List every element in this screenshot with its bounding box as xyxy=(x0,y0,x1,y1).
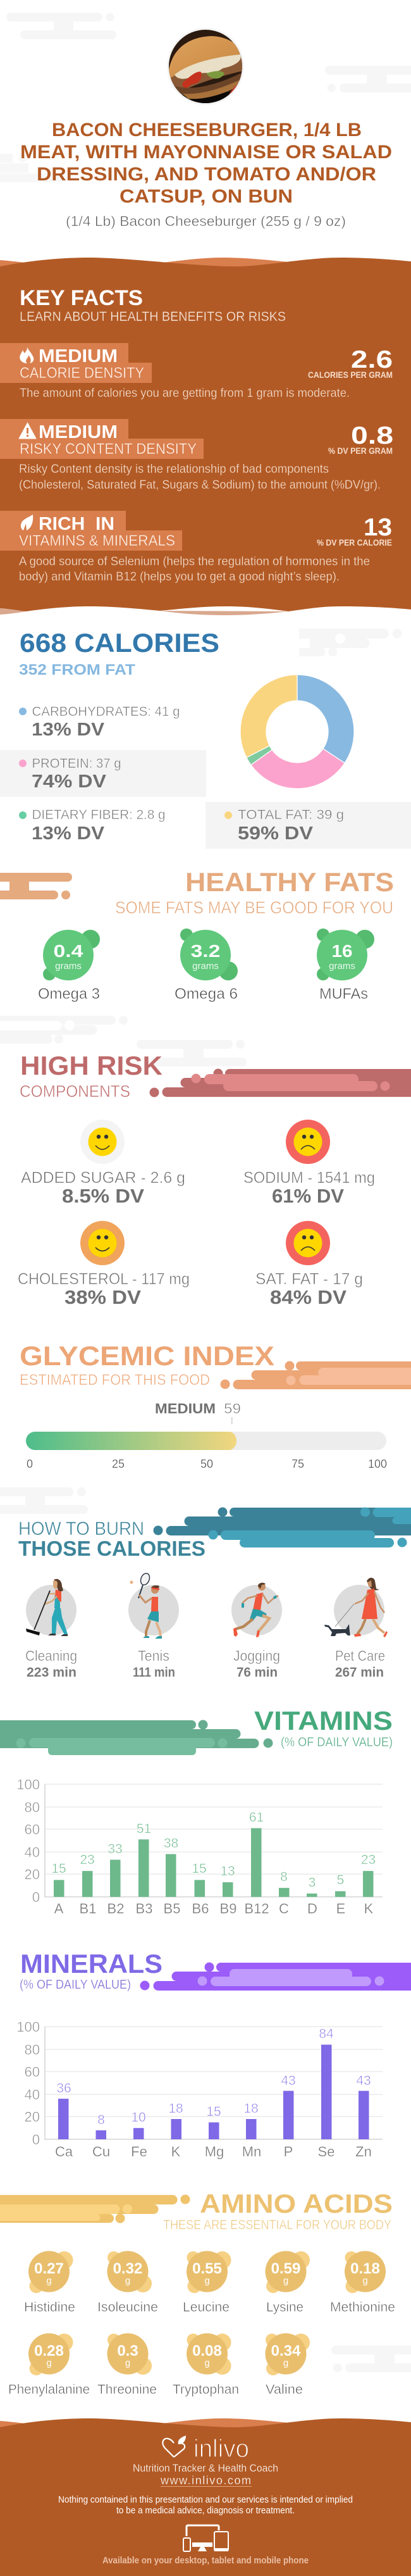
value unit: % DV PER GRAM xyxy=(328,446,393,456)
bar chart: minerals: 36 xyxy=(56,2081,71,2096)
badge: omega 6: grams xyxy=(192,961,219,972)
subheading: LEARN ABOUT HEALTH BENEFITS OR RISKS xyxy=(20,309,286,324)
amino: valine: g xyxy=(283,2358,288,2368)
background cloud top left xyxy=(6,13,116,39)
activity time: 111 min xyxy=(133,1665,175,1680)
background cloud above burn section xyxy=(0,1487,88,1514)
legend: carbohydrates: 13% DV xyxy=(32,720,105,740)
rating label: MEDIUM xyxy=(39,346,118,366)
panel: vitamins xyxy=(0,1706,393,1916)
bar chart: vitamins: 51 xyxy=(137,1822,151,1836)
serving subtitle: (1/4 Lb) Bacon Cheeseburger (255 g / 9 oz) xyxy=(66,213,346,229)
bar chart: minerals: 18 xyxy=(243,2101,259,2116)
subheading: ESTIMATED FOR THIS FOOD xyxy=(20,1372,210,1389)
bar chart: vitamins: B12 xyxy=(244,1901,269,1916)
risk: added sugar: 8.5% DV xyxy=(62,1185,144,1207)
bar chart: minerals: Ca xyxy=(55,2144,73,2160)
subheading: calories from fat: 352 FROM FAT xyxy=(19,661,135,678)
bar chart: vitamins: B9 xyxy=(220,1901,236,1916)
heading: HEALTHY FATS xyxy=(185,867,394,897)
label: RISKY CONTENT DENSITY xyxy=(20,441,197,458)
legend: dietary fiber: 13% DV xyxy=(32,823,105,844)
bar chart: minerals: 8 xyxy=(97,2113,105,2127)
subheading: (% OF DAILY VALUE) xyxy=(20,1978,131,1992)
title: MEAT, WITH MAYONNAISE OR SALAD xyxy=(20,142,392,163)
bar chart: vitamins: 38 xyxy=(164,1836,178,1851)
gauge value: MEDIUM xyxy=(155,1401,216,1416)
risk: sodium: 61% DV xyxy=(272,1185,344,1207)
legend: dietary fiber: DIETARY FIBER: 2.8 g xyxy=(32,808,166,822)
amino: histidine xyxy=(24,2251,75,2315)
amino: leucine: g xyxy=(204,2275,210,2286)
bar chart: minerals: P xyxy=(284,2144,293,2160)
legend: total fat: 59% DV xyxy=(238,823,314,844)
value unit: % DV PER CALORIE xyxy=(317,537,392,547)
amino: methionine: Methionine xyxy=(330,2300,395,2315)
background cloud above high risk right xyxy=(137,1040,247,1066)
legend: carbohydrates xyxy=(19,704,180,740)
risk: added sugar: ADDED SUGAR - 2.6 g xyxy=(21,1169,185,1187)
description: (Cholesterol, Saturated Fat, Sugars & Sodium) to the amount (%DV/gr). xyxy=(19,478,381,492)
gauge value: 59 xyxy=(224,1401,241,1416)
badge: omega 3: grams xyxy=(55,961,82,972)
rating label: MEDIUM xyxy=(39,422,118,442)
value unit: CALORIES PER GRAM xyxy=(308,370,393,380)
amino: methionine: g xyxy=(362,2275,368,2286)
amino: lysine xyxy=(266,2251,310,2315)
bar chart: vitamins: 20 xyxy=(25,1866,40,1882)
legend: protein: PROTEIN: 37 g xyxy=(32,756,121,771)
fact: calorie density xyxy=(0,343,393,400)
amino: lysine: g xyxy=(283,2275,288,2286)
risk: saturated fat: SAT. FAT - 17 g xyxy=(255,1270,363,1288)
panel: footer xyxy=(0,2418,411,2576)
bar chart: vitamins: 15 xyxy=(51,1861,66,1876)
value: 0.8 xyxy=(351,422,393,449)
bar chart: minerals: Se xyxy=(318,2144,334,2160)
label: CALORIE DENSITY xyxy=(20,365,144,382)
legend: dietary fiber xyxy=(19,808,166,844)
risk: cholesterol: CHOLESTEROL - 117 mg xyxy=(18,1270,190,1288)
disclaimer: to be a medical advice, diagnosis or treatment. xyxy=(116,2505,295,2516)
description: The amount of calories you are getting from 1 gram is moderate. xyxy=(20,387,350,400)
gauge scale: 0 xyxy=(27,1458,33,1470)
activity: pet care xyxy=(324,1578,388,1680)
availability note: Available on your desktop, tablet and mobile phone xyxy=(102,2555,309,2566)
badge: MUFAs: 16 xyxy=(331,941,353,961)
amino: phenylalanine: Phenylalanine xyxy=(8,2382,90,2397)
badge: omega 3: Omega 3 xyxy=(38,985,100,1003)
gauge bar xyxy=(26,1432,386,1450)
badge: MUFAs xyxy=(317,928,374,1003)
heading: calories: 668 CALORIES xyxy=(20,628,219,658)
bar chart: minerals: K xyxy=(171,2144,181,2160)
panel: how to burn calories xyxy=(18,1508,411,1680)
bar chart: vitamins: A xyxy=(54,1901,64,1916)
subheading: (% OF DAILY VALUE) xyxy=(281,1735,393,1749)
bar chart: vitamins: 0 xyxy=(32,1889,40,1905)
decorative cloud xyxy=(220,1361,411,1389)
activity time: 267 min xyxy=(335,1665,384,1680)
risk: sodium xyxy=(243,1120,375,1207)
bar chart: minerals xyxy=(16,2019,383,2160)
background cloud above high risk left xyxy=(0,1016,128,1044)
amino: threonine: 0.3 xyxy=(117,2342,138,2360)
badge: omega 3: 0.4 xyxy=(53,941,83,961)
bar chart: vitamins: 5 xyxy=(337,1873,344,1887)
activity: jogging xyxy=(231,1583,282,1680)
amino: leucine: 0.55 xyxy=(192,2260,222,2277)
activity label: Jogging xyxy=(233,1648,280,1664)
panel: key facts xyxy=(0,258,411,615)
bar chart: minerals: 0 xyxy=(32,2132,40,2148)
title: DRESSING, AND TOMATO AND/OR xyxy=(37,164,376,185)
decorative cloud xyxy=(0,2195,190,2223)
amino: threonine: Threonine xyxy=(97,2382,157,2397)
subheading: SOME FATS MAY BE GOOD FOR YOU xyxy=(115,898,393,917)
fact: risky content density xyxy=(0,419,393,492)
gauge tick xyxy=(231,1417,233,1424)
legend: protein: 74% DV xyxy=(32,772,107,792)
label: VITAMINS & MINERALS xyxy=(19,532,175,549)
icon: warning triangle xyxy=(19,423,36,439)
legend: total fat xyxy=(206,802,411,849)
description: A good source of Selenium (helps the regulation of hormones in the xyxy=(19,555,370,568)
value: 13 xyxy=(364,514,392,541)
icon: desktop, tablet and phone xyxy=(183,2525,228,2551)
amino: methionine: 0.18 xyxy=(350,2260,380,2277)
legend: carbohydrates: CARBOHYDRATES: 41 g xyxy=(32,704,180,719)
panel: glycemic index xyxy=(20,1341,411,1470)
risk: cholesterol: 38% DV xyxy=(64,1286,141,1308)
bar chart: minerals: 43 xyxy=(281,2073,296,2088)
amino: histidine: 0.27 xyxy=(34,2260,64,2277)
bar chart: minerals: 20 xyxy=(25,2109,40,2125)
risk: saturated fat xyxy=(255,1221,363,1308)
bar chart: vitamins: B3 xyxy=(136,1901,152,1916)
amino: lysine: 0.59 xyxy=(271,2260,300,2277)
decorative cloud xyxy=(0,1720,273,1755)
amino: leucine: Leucine xyxy=(183,2300,230,2315)
amino: isoleucine: 0.32 xyxy=(113,2260,142,2277)
amino: valine: 0.34 xyxy=(271,2342,301,2360)
description xyxy=(19,463,381,492)
description: body) and Vitamin B12 (helps you to get a good night’s sleep). xyxy=(19,570,340,584)
bar chart: vitamins: D xyxy=(307,1901,317,1916)
amino: histidine: Histidine xyxy=(24,2300,75,2315)
bar chart: minerals: 10 xyxy=(131,2110,146,2125)
heading line 2: THOSE CALORIES xyxy=(18,1537,206,1560)
bar chart: vitamins: B5 xyxy=(164,1901,180,1916)
donut chart xyxy=(240,675,354,789)
amino: methionine xyxy=(330,2251,395,2315)
subheading: COMPONENTS xyxy=(20,1082,130,1101)
amino: phenylalanine xyxy=(8,2333,90,2397)
amino: lysine: Lysine xyxy=(266,2300,304,2315)
badge: omega 6: Omega 6 xyxy=(175,985,238,1003)
decorative cloud xyxy=(153,1508,411,1547)
amino: threonine: g xyxy=(125,2358,130,2368)
disclaimer: Nothing contained in this presentation and our services is intended or implied xyxy=(58,2494,353,2505)
badge: MUFAs: grams xyxy=(329,961,355,972)
bar chart: vitamins: 100 xyxy=(16,1777,40,1792)
title xyxy=(20,120,392,207)
amino: tryptophan: Tryptophan xyxy=(173,2382,239,2397)
bar chart: vitamins: 3 xyxy=(309,1875,316,1890)
icon: leaf xyxy=(21,515,33,530)
tagline: Nutrition Tracker & Health Coach xyxy=(133,2462,278,2474)
activity label: Pet Care xyxy=(335,1648,385,1664)
gauge scale: 75 xyxy=(291,1458,304,1470)
activity label: Cleaning xyxy=(25,1648,77,1664)
bar chart: vitamins: 15 xyxy=(192,1861,207,1876)
amino: valine xyxy=(266,2333,310,2397)
rating label: RICH IN xyxy=(39,514,114,534)
bar chart: vitamins: 40 xyxy=(25,1844,40,1860)
bar chart: vitamins: 13 xyxy=(220,1864,235,1879)
bar chart: vitamins: 80 xyxy=(25,1799,40,1815)
badge: MUFAs: MUFAs xyxy=(319,985,368,1003)
activity: cleaning xyxy=(25,1579,77,1680)
risk: sodium: SODIUM - 1541 mg xyxy=(243,1169,375,1187)
background cloud near amino acids xyxy=(331,2346,411,2372)
bar chart: vitamins: 23 xyxy=(80,1853,95,1867)
decorative cloud xyxy=(140,1962,411,1991)
bar chart: vitamins: E xyxy=(336,1901,345,1916)
amino: isoleucine: Isoleucine xyxy=(97,2300,158,2315)
panel: minerals xyxy=(16,1949,411,2160)
activity time: 76 min xyxy=(236,1665,278,1680)
bar chart: minerals: Mg xyxy=(205,2144,224,2160)
bar chart: minerals: Cu xyxy=(92,2144,110,2160)
bar chart: vitamins: K xyxy=(364,1901,374,1916)
bar chart: vitamins: C xyxy=(279,1901,289,1916)
disclaimer xyxy=(58,2494,353,2516)
logo wordmark: inlivo xyxy=(193,2435,249,2463)
gauge scale: 50 xyxy=(200,1458,213,1470)
panel: high risk components xyxy=(18,1051,411,1308)
bar chart: minerals: 40 xyxy=(25,2087,40,2103)
background cloud near calories xyxy=(299,628,402,656)
bar chart: minerals: Zn xyxy=(355,2144,372,2160)
bar chart: vitamins: B6 xyxy=(192,1901,209,1916)
heading: AMINO ACIDS xyxy=(200,2189,393,2218)
amino: valine: Valine xyxy=(266,2382,303,2397)
bar chart: vitamins: 60 xyxy=(25,1822,40,1837)
bar chart: minerals: 43 xyxy=(356,2073,371,2088)
panel: healthy fats xyxy=(0,867,394,1003)
amino: tryptophan xyxy=(173,2333,239,2397)
bar chart: minerals: 84 xyxy=(319,2027,334,2041)
badge: omega 6 xyxy=(175,928,238,1003)
bar chart: minerals: 100 xyxy=(16,2019,40,2035)
bar chart: minerals: 18 xyxy=(168,2101,183,2116)
bar chart: minerals: 80 xyxy=(25,2042,40,2058)
amino: histidine: g xyxy=(46,2275,52,2286)
activity time: 223 min xyxy=(27,1665,77,1680)
risk: saturated fat: 84% DV xyxy=(270,1286,347,1308)
heading: HIGH RISK xyxy=(20,1051,163,1080)
amino: threonine xyxy=(97,2333,157,2397)
amino: leucine xyxy=(183,2251,231,2315)
title: BACON CHEESEBURGER, 1/4 LB xyxy=(52,120,362,141)
legend: protein xyxy=(0,750,206,797)
gauge scale: 100 xyxy=(368,1458,387,1470)
description xyxy=(19,555,370,584)
activity label: Tenis xyxy=(138,1648,169,1664)
icon: flame xyxy=(20,346,34,363)
panel: calories xyxy=(0,628,411,849)
bar chart: vitamins: 61 xyxy=(249,1810,264,1825)
bar chart: vitamins: B1 xyxy=(80,1901,96,1916)
decorative cloud xyxy=(0,873,72,899)
gauge value xyxy=(155,1401,241,1416)
description: Risky Content density is the relationship of bad components xyxy=(19,463,329,476)
gauge scale: 25 xyxy=(112,1458,125,1470)
value: 2.6 xyxy=(351,346,393,373)
bar chart: minerals: Fe xyxy=(131,2144,147,2160)
bar chart: minerals: 60 xyxy=(25,2064,40,2080)
amino: tryptophan: g xyxy=(204,2358,210,2368)
badge: omega 3 xyxy=(38,930,100,1003)
background cloud behind title xyxy=(0,154,63,182)
legend: total fat: TOTAL FAT: 39 g xyxy=(238,808,344,822)
amino: tryptophan: 0.08 xyxy=(192,2342,222,2360)
risk: added sugar xyxy=(21,1120,185,1207)
heading: MINERALS xyxy=(20,1949,163,1979)
gauge scale xyxy=(27,1458,387,1470)
activity: tennis xyxy=(128,1572,179,1680)
heading: key facts: KEY FACTS xyxy=(20,286,143,310)
bar chart: vitamins: 23 xyxy=(361,1853,376,1867)
bar chart: vitamins: 8 xyxy=(280,1870,288,1884)
background cloud top right xyxy=(325,66,411,92)
bar chart: vitamins: 33 xyxy=(107,1842,123,1856)
heading line 1: HOW TO BURN xyxy=(18,1518,144,1539)
bar chart: vitamins: B2 xyxy=(107,1901,124,1916)
amino: isoleucine: g xyxy=(125,2275,130,2286)
heading: GLYCEMIC INDEX xyxy=(20,1341,274,1372)
panel: amino acids xyxy=(0,2189,395,2397)
amino: phenylalanine: 0.28 xyxy=(34,2342,64,2360)
heading: VITAMINS xyxy=(254,1706,393,1735)
food photo: burger xyxy=(167,28,244,105)
bar chart: minerals: Mn xyxy=(242,2144,261,2160)
bar chart: vitamins xyxy=(16,1777,383,1916)
website: www.inlivo.com xyxy=(160,2474,251,2487)
fact: rich in vitamins and minerals xyxy=(0,511,392,584)
badge: omega 6: 3.2 xyxy=(191,941,220,961)
risk: cholesterol xyxy=(18,1221,190,1308)
amino: phenylalanine: g xyxy=(46,2358,52,2368)
amino: isoleucine xyxy=(97,2251,158,2315)
title: CATSUP, ON BUN xyxy=(120,186,293,207)
logo: inlivo heart and leaf xyxy=(163,2435,186,2457)
bar chart: minerals: 15 xyxy=(206,2104,221,2119)
decorative cloud xyxy=(149,1068,411,1097)
